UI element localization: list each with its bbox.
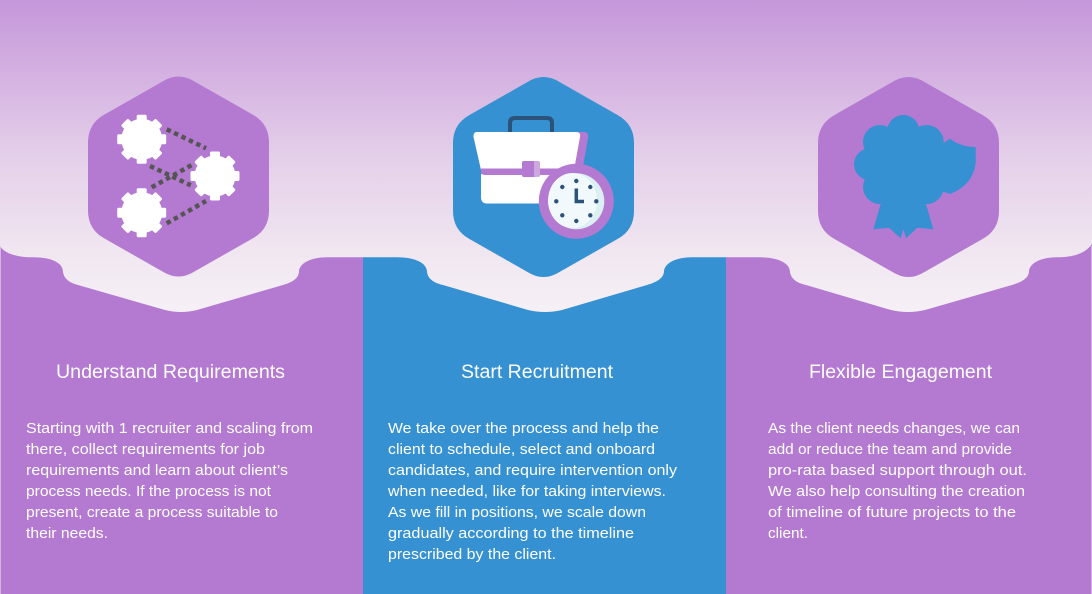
body: understand requirements [26, 421, 313, 542]
body: understand requirements: Starting with 1 recruiter and scaling from [26, 421, 313, 437]
clock [539, 164, 614, 239]
heading: flexible engagement: Flexible Engagement [809, 362, 993, 383]
dotted connectors [150, 129, 206, 223]
body: start recruitment [387, 421, 678, 563]
body: understand requirements: their needs. [26, 526, 108, 542]
body: flexible engagement: add or reduce the team and provide [768, 442, 1012, 458]
icon: briefcase and clock hexagon [453, 77, 634, 277]
body: understand requirements: process needs. If the process is not [26, 484, 271, 500]
body: understand requirements: there, collect requirements for job [26, 442, 265, 458]
body: start recruitment: We take over the process and help the [388, 421, 659, 437]
hexagon: blue [453, 77, 634, 277]
heading: start recruitment: Start Recruitment [461, 362, 614, 383]
briefcase body [473, 132, 580, 204]
text block: flexible engagement [768, 362, 1027, 542]
text block: understand requirements [26, 362, 313, 542]
body: start recruitment: client to schedule, select and onboard [388, 442, 655, 458]
gear: bottom left [117, 188, 166, 237]
briefcase buckle [522, 161, 540, 177]
icon: award ribbon hexagon [818, 77, 999, 277]
gear: right [190, 152, 240, 200]
briefcase handle [510, 118, 552, 133]
hexagon: purple [88, 76, 269, 276]
heading: understand requirements: Understand Requirements [56, 362, 285, 383]
body: understand requirements: present, create a process suitable to [26, 505, 278, 521]
panel: start recruitment background [363, 240, 726, 594]
gear: top left [117, 115, 166, 164]
header wave band [0, 0, 1092, 312]
body: start recruitment: As we fill in positions, we scale down [388, 505, 646, 521]
body: start recruitment: when needed, like for taking interviews. [387, 484, 666, 500]
body: flexible engagement: pro-rata based support through out. [768, 463, 1027, 479]
hexagon: purple [818, 77, 999, 277]
body: start recruitment: candidates, and require intervention only [388, 463, 678, 479]
text block: start recruitment [387, 362, 678, 563]
body: flexible engagement [768, 421, 1027, 542]
award rosette and ribbon [854, 115, 976, 238]
icon: connected gears hexagon [88, 76, 269, 276]
briefcase back edge [570, 132, 588, 172]
briefcase strap [481, 168, 565, 175]
body: start recruitment: gradually according to the timeline [388, 526, 634, 542]
panel: flexible engagement background [726, 240, 1092, 594]
body: flexible engagement: of timeline of future projects to the [768, 505, 1016, 521]
body: flexible engagement: We also help consulting the creation [768, 484, 1025, 500]
body: understand requirements: requirements and learn about client’s [26, 463, 288, 479]
body: flexible engagement: As the client needs changes, we can [768, 421, 1020, 437]
body: flexible engagement: client. [768, 526, 808, 542]
body: start recruitment: prescribed by the client. [388, 547, 556, 563]
panel: understand requirements background [0, 240, 363, 594]
